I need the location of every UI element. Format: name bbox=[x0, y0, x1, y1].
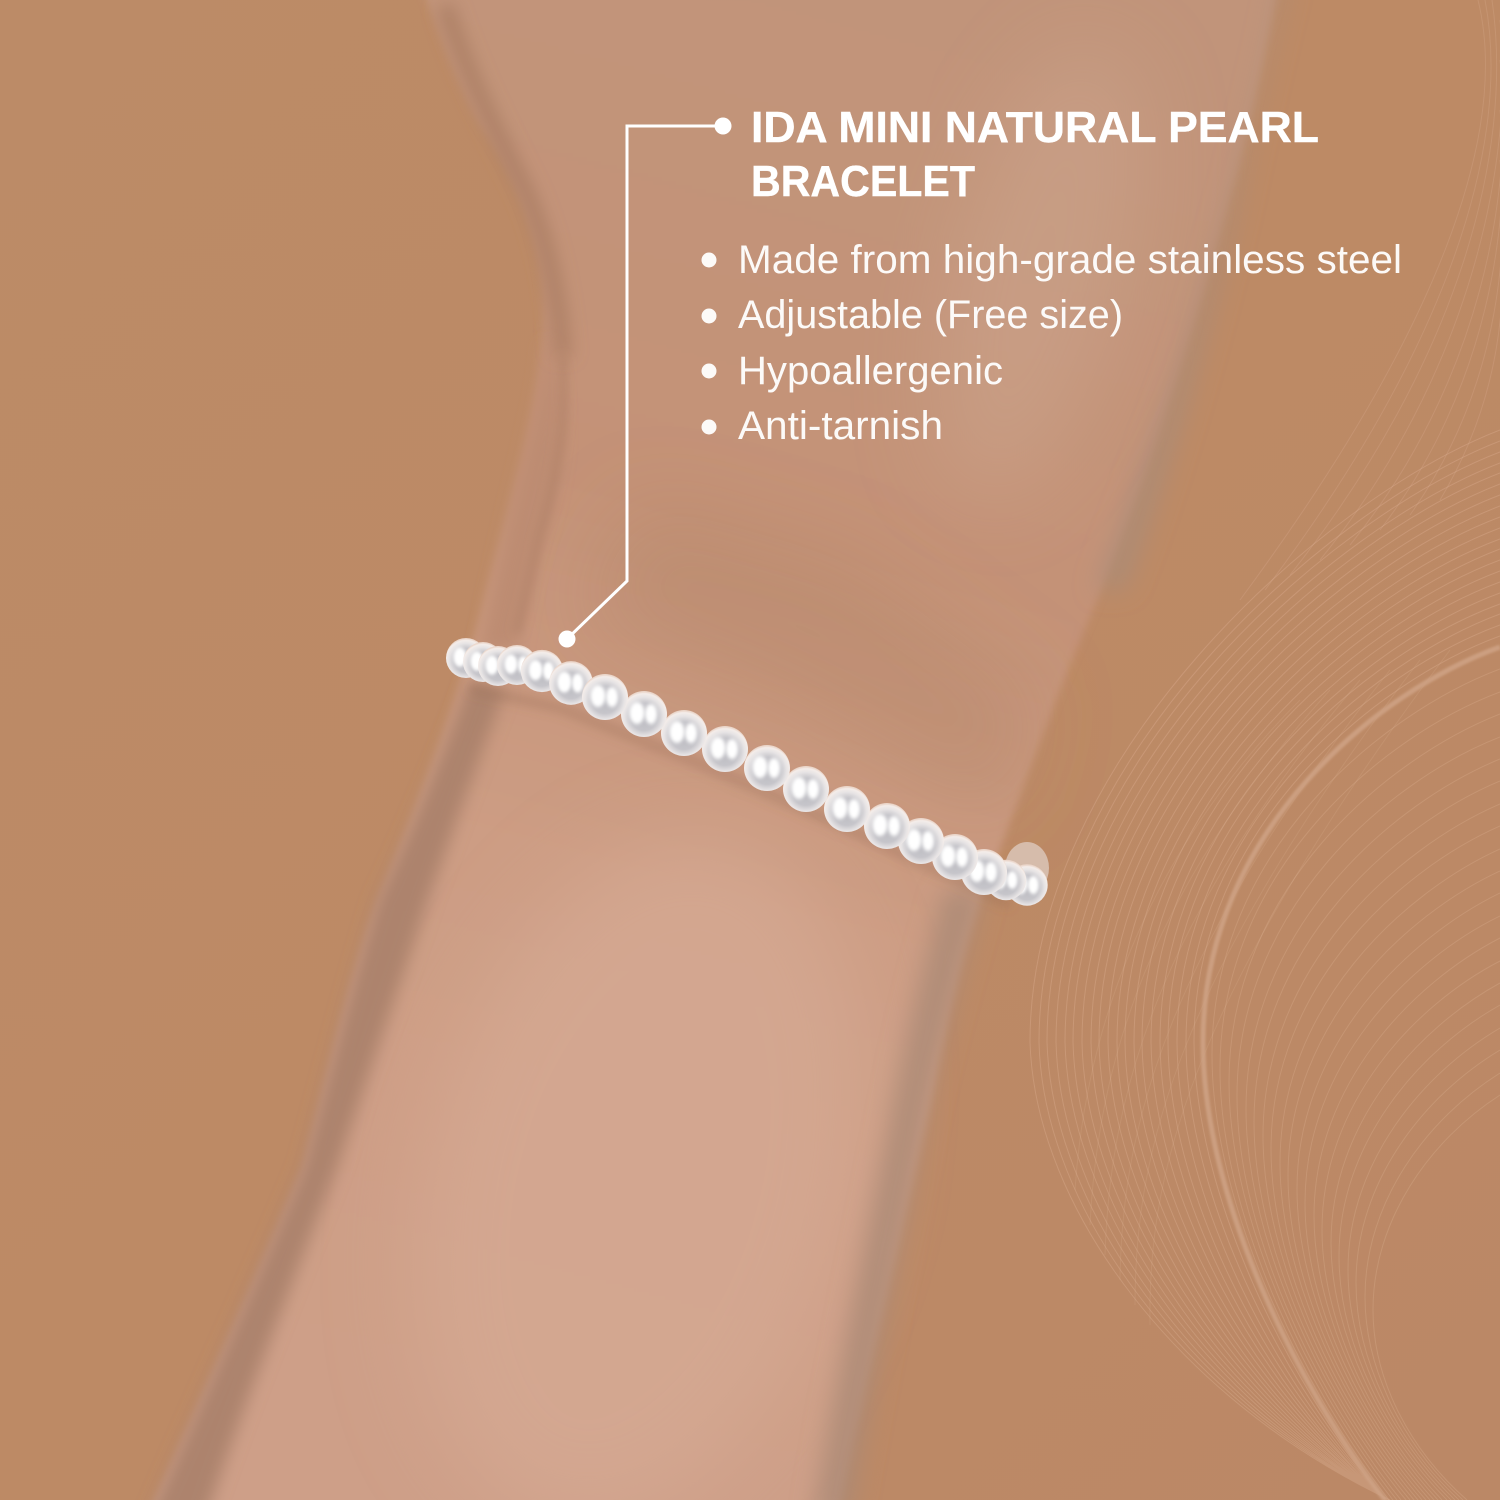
bullet item: hypoallergenic: Hypoallergenic bbox=[738, 349, 1003, 393]
wrist side band bbox=[480, 340, 560, 650]
arm shading: right upper edge shadow bbox=[1095, 0, 1290, 590]
pearl bracelet bbox=[446, 638, 1049, 906]
arm shape bbox=[150, 0, 1278, 1500]
arm shading: inner lit area bbox=[342, 786, 938, 1500]
decorative wave line pattern bbox=[1030, 0, 1500, 1500]
bullet item: stainless steel: Made from high-grade stainless steel bbox=[738, 238, 1402, 282]
bullet item: anti-tarnish: Anti-tarnish bbox=[738, 404, 943, 448]
arm shading: shadow above bracelet bbox=[580, 500, 1040, 820]
callout connector line bbox=[558, 118, 732, 648]
bracelet shadow bbox=[470, 688, 1010, 904]
arm shading: left lower edge band bbox=[148, 680, 505, 1500]
wrist crease bbox=[517, 357, 564, 633]
title: IDA MINI NATURAL PEARL bbox=[751, 103, 1319, 152]
feature list bbox=[702, 238, 1402, 448]
title: BRACELET bbox=[751, 157, 975, 206]
front pearls bbox=[582, 674, 1048, 906]
forearm bbox=[148, 0, 1290, 1500]
arm shading: upper highlight bbox=[898, 26, 1182, 514]
left pearls bbox=[446, 638, 593, 705]
upper fold shadow bbox=[445, 5, 563, 357]
arm shading: right lower edge shadow bbox=[813, 890, 985, 1500]
title bbox=[751, 103, 1319, 206]
bullet item: adjustable: Adjustable (Free size) bbox=[738, 293, 1123, 337]
far-side pearl bbox=[1005, 842, 1049, 894]
